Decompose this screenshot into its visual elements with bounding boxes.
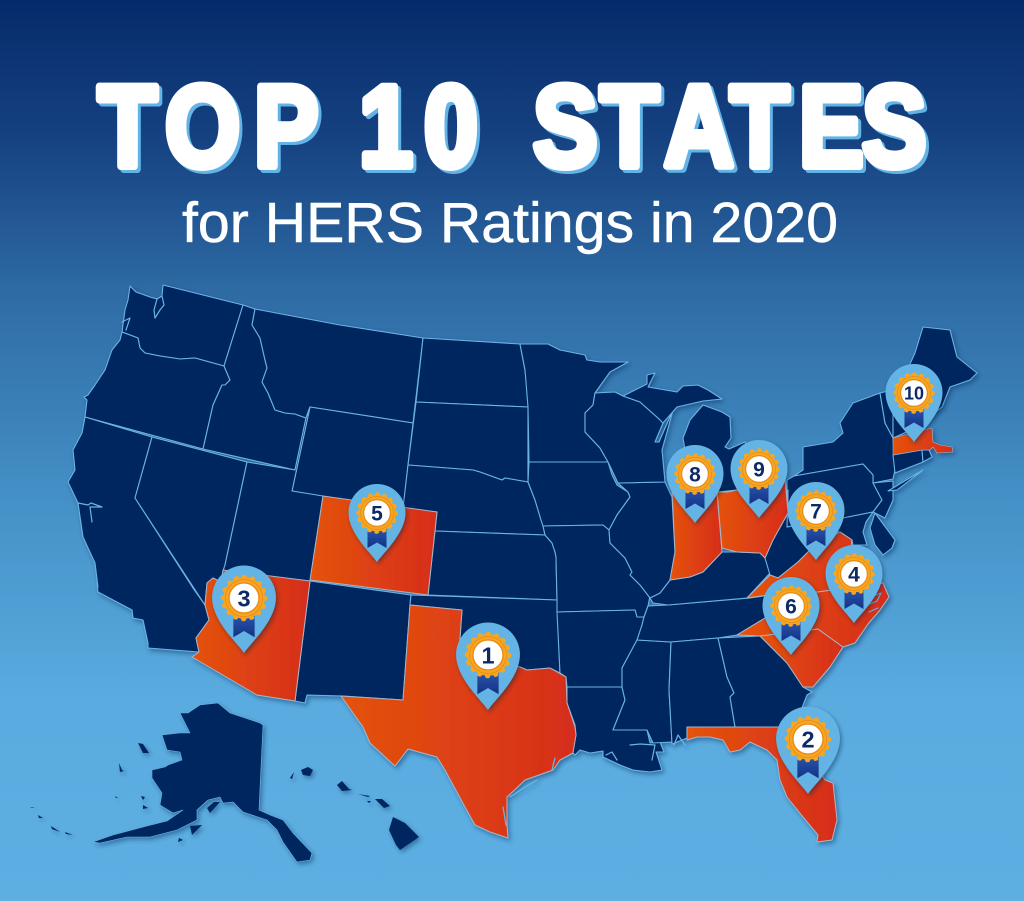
state: Minnesota [520, 344, 628, 462]
state: Illinois [609, 482, 675, 598]
state: Utah [223, 407, 323, 581]
state: Washington [122, 285, 243, 366]
state: Maryland [787, 512, 873, 545]
pin 10 [886, 364, 942, 442]
state: Maine [905, 327, 977, 420]
subtitle: for HERS Ratings in 2020 [182, 191, 838, 255]
pin 2: 2 [801, 726, 815, 752]
state: South Carolina [760, 629, 843, 687]
state: Hawaii [290, 767, 419, 850]
pin 5 [348, 484, 406, 562]
state: Pennsylvania [787, 464, 882, 527]
state: Mississippi [613, 640, 672, 743]
state: New Mexico [295, 581, 411, 703]
state: New Hampshire [893, 375, 922, 438]
state: Arkansas [557, 610, 644, 687]
state: Iowa [528, 462, 630, 530]
state: Wisconsin [585, 392, 673, 483]
state: North Carolina [737, 583, 889, 647]
state: Delaware and Delmarva [870, 513, 895, 555]
state: Indiana [670, 490, 722, 580]
state: South Dakota [408, 402, 528, 482]
pin 2 [776, 707, 840, 794]
pin 9 [730, 440, 788, 518]
state: New Jersey [873, 481, 893, 518]
state: Colorado [310, 496, 437, 595]
title: TOP 10 STATES [98, 62, 929, 194]
state: Michigan upper peninsula [623, 373, 722, 423]
state: Missouri [543, 525, 650, 617]
pin 4 [826, 545, 882, 623]
state: New York [794, 393, 895, 483]
pin 8 [666, 445, 724, 523]
Alaska islands [30, 743, 220, 842]
title shadow: TOP 10 STATES [101, 65, 929, 194]
state: Connecticut [893, 450, 923, 473]
state: Nebraska [403, 465, 545, 535]
title face: TOP 10 STATES [98, 62, 926, 191]
pin 7 [788, 482, 844, 560]
pin 10: 10 [904, 384, 924, 404]
pin 3: 3 [237, 585, 251, 611]
state: Kentucky [650, 552, 770, 605]
state: North Dakota [416, 338, 528, 407]
state: Florida [687, 727, 837, 842]
state: Wyoming [292, 407, 413, 510]
pin 6 [762, 577, 820, 655]
state: Oklahoma [410, 595, 560, 673]
pin 4: 4 [848, 564, 860, 586]
state: Montana [252, 309, 423, 423]
state: Georgia [718, 636, 812, 727]
state: California [68, 417, 209, 652]
state: Michigan lower peninsula [680, 405, 752, 494]
pin 6: 6 [785, 596, 797, 618]
state: Virginia [747, 532, 883, 598]
state: Texas [341, 605, 576, 838]
pin 1: 1 [481, 642, 495, 668]
state: Massachusetts [893, 428, 953, 455]
pin 9: 9 [753, 458, 765, 482]
state: Vermont [880, 389, 896, 438]
coastal and inland water lines [78, 296, 881, 825]
state: Kansas [428, 531, 557, 600]
pin 5: 5 [371, 502, 383, 526]
state: Rhode Island [922, 450, 932, 462]
state: Tennessee [637, 592, 790, 642]
pin 8: 8 [689, 464, 701, 486]
state: Alabama [669, 638, 735, 744]
state: Ohio [717, 478, 788, 558]
state: Arizona [192, 570, 310, 701]
pin 1 [456, 623, 520, 710]
state: Louisiana [567, 687, 664, 772]
pin 7: 7 [810, 500, 822, 524]
state: Alaska [93, 703, 312, 862]
state: Idaho [203, 305, 306, 470]
pin 3 [212, 566, 276, 653]
Long Island [888, 470, 923, 491]
state: West Virginia [765, 490, 840, 578]
state: Oregon [84, 332, 230, 449]
map of the United States [30, 285, 977, 862]
state: Nevada [135, 437, 247, 605]
